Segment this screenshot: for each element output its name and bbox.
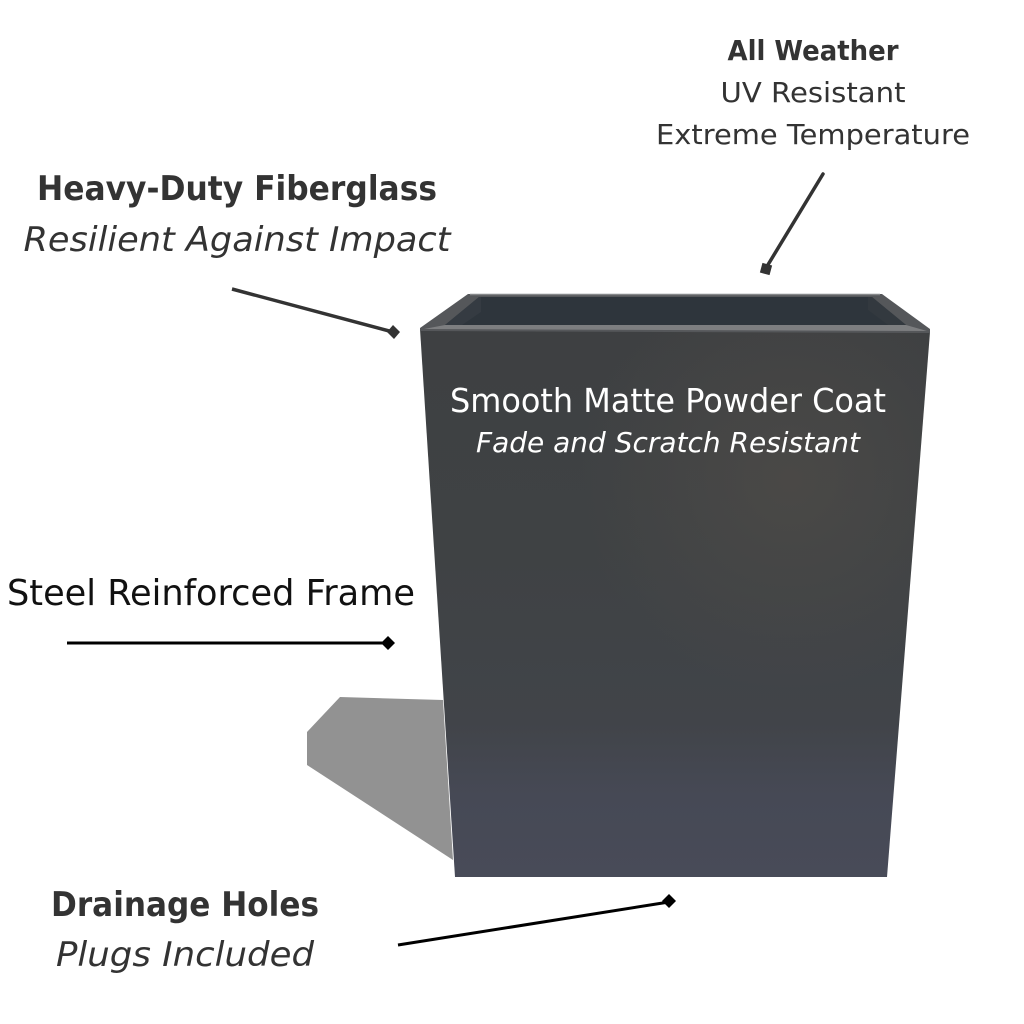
label: heavy-duty fiberglass [24, 169, 452, 260]
label: drainage holes: Drainage Holes [51, 885, 319, 925]
arrow: heavy-duty fiberglass [232, 289, 400, 339]
label: all weather: Extreme Temperature [656, 118, 970, 151]
planter shadow [307, 697, 453, 860]
label: smooth matte powder coat: Smooth Matte Powder Coat [450, 381, 886, 420]
planter body [420, 329, 930, 877]
label: smooth matte powder coat [450, 381, 886, 459]
label: all weather: All Weather [728, 34, 899, 67]
label: heavy-duty fiberglass: Resilient Against Impact [24, 220, 452, 260]
arrow: steel reinforced frame [67, 636, 395, 650]
label: drainage holes [51, 885, 319, 975]
planter opening [445, 297, 906, 325]
label: steel reinforced frame: Steel Reinforced Frame [7, 573, 415, 614]
label: smooth matte powder coat: Fade and Scratch Resistant [476, 426, 861, 459]
label: heavy-duty fiberglass: Heavy-Duty Fiberglass [37, 169, 437, 209]
label: all weather: UV Resistant [720, 76, 906, 109]
arrow: all weather [760, 174, 823, 275]
planter rim [420, 294, 930, 333]
arrow: drainage holes [398, 894, 676, 945]
label: all weather [656, 34, 970, 151]
label: drainage holes: Plugs Included [56, 935, 314, 975]
planter [420, 294, 930, 877]
